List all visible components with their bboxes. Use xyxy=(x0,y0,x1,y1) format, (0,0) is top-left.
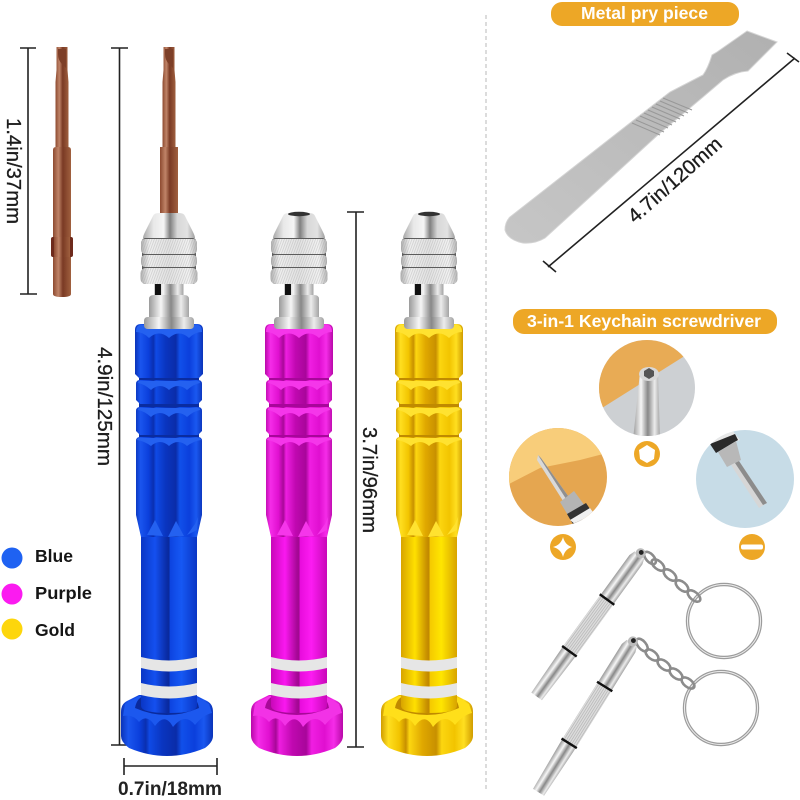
legend: purple: Purple xyxy=(35,583,92,603)
keychain screwdriver 2 xyxy=(531,632,758,797)
tool body 2 xyxy=(531,632,643,797)
key ring 1 xyxy=(688,584,760,658)
metal pry tool xyxy=(505,31,777,243)
icon: hex tip xyxy=(634,441,660,467)
label: 3.7in/96mm: 3.7in/96mm xyxy=(358,427,380,533)
chain 2 xyxy=(634,637,696,691)
dimension: bit length xyxy=(2,48,37,294)
dimension: blue screwdriver length xyxy=(93,48,128,745)
heading: metal pry piece: Metal pry piece xyxy=(581,3,708,23)
tool body 1 xyxy=(529,544,651,702)
chain 1 xyxy=(642,550,702,604)
label: 4.7in/120mm: 4.7in/120mm xyxy=(624,133,727,228)
photo: hex socket tip xyxy=(599,340,695,436)
photo: cross tip xyxy=(509,428,607,530)
label: 4.9in/125mm: 4.9in/125mm xyxy=(93,347,115,466)
photo: flat tip xyxy=(696,430,794,528)
heading: keychain screwdriver: 3-in-1 Keychain screwdriver xyxy=(527,311,761,331)
icon: flat tip xyxy=(739,534,765,560)
screwdriver: blue xyxy=(121,47,213,756)
label: 1.4in/37mm: 1.4in/37mm xyxy=(2,118,24,224)
screwdriver: purple xyxy=(251,212,343,756)
vertical dashed divider xyxy=(485,15,487,790)
legend: gold: Gold xyxy=(35,620,75,640)
label: 0.7in/18mm: 0.7in/18mm xyxy=(118,779,222,800)
keychain screwdriver 1 xyxy=(529,544,760,702)
dimension: base width xyxy=(118,758,222,800)
icon: cross tip xyxy=(550,534,576,560)
screwdriver: gold xyxy=(381,212,473,756)
spare bit xyxy=(51,47,73,297)
colour legend xyxy=(2,546,92,640)
key ring 2 xyxy=(684,672,758,744)
dimension: pry tool length xyxy=(543,53,799,272)
dimension: handle length xyxy=(347,212,380,747)
heading: metal pry piece xyxy=(551,2,739,26)
legend: blue: Blue xyxy=(35,546,73,566)
